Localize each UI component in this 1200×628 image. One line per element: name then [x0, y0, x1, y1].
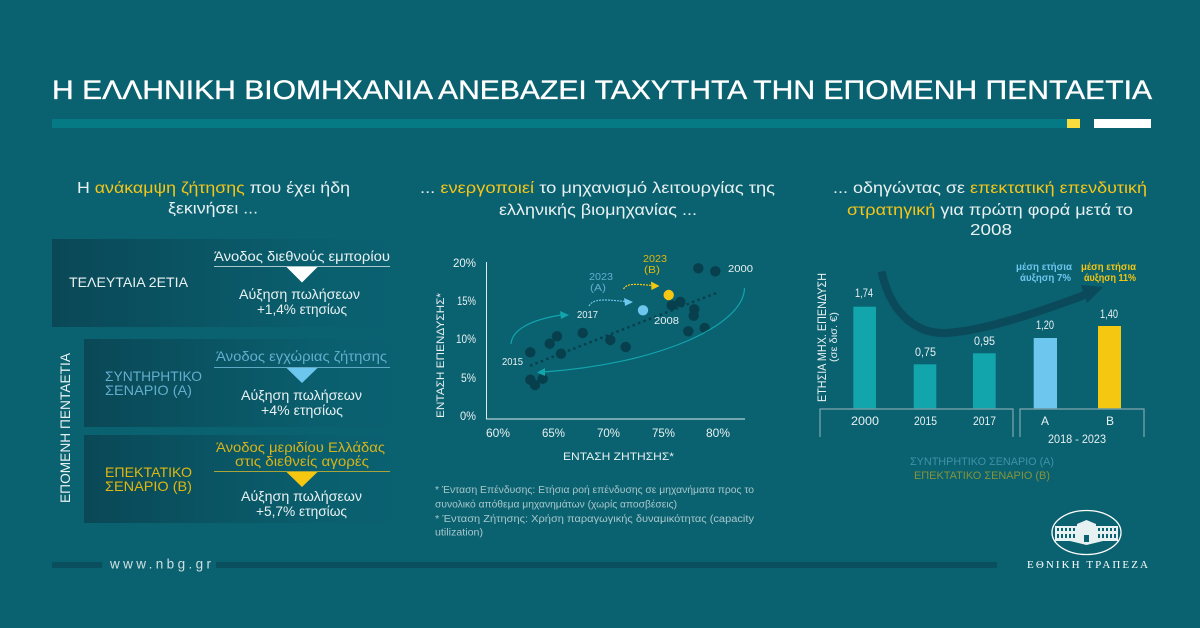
heading: middle column: ... ενεργοποιεί το μηχανισμό λειτουργίας της: [420, 180, 775, 197]
bar chart: [817, 262, 1144, 446]
panel: last two years: [52, 239, 402, 327]
point labels: [502, 253, 753, 368]
growth callouts: άυξηση 11%: [1084, 273, 1136, 284]
growth arrow: [882, 272, 1103, 333]
point labels: (Β): [644, 264, 660, 276]
bar chart: (σε δισ. €): [829, 312, 840, 362]
footnotes: [435, 484, 754, 538]
panel: scenario B: +5,7% ετησίως: [256, 503, 347, 519]
label: next five years: ΕΠΟΜΕΝΗ ΠΕΝΤΑΕΤΙΑ: [57, 352, 73, 503]
axis labels: ΕΝΤΑΣΗ ΕΠΕΝΔΥΣΗΣ*: [435, 292, 447, 418]
panel: last two years: Άνοδος διεθνούς εμπορίου: [214, 248, 390, 264]
scatter chart: [435, 253, 753, 463]
panel: last two years: +1,4% ετησίως: [257, 301, 347, 317]
panel: scenario B: [84, 435, 402, 523]
point labels: 2023: [589, 271, 613, 283]
legend: [910, 456, 1054, 482]
x labels: 2017: [973, 416, 996, 428]
point labels: 2000: [728, 263, 753, 275]
title rule: [52, 119, 1151, 128]
heading: middle column: ελληνικής βιομηχανίας ...: [499, 202, 697, 219]
point labels: 2015: [502, 356, 523, 368]
bar values: 1,20: [1036, 320, 1054, 332]
axis labels: 75%: [652, 428, 675, 440]
logo: National Bank of Greece: ΕΘΝΙΚΗ ΤΡΑΠΕΖΑ: [1027, 559, 1148, 571]
axis labels: ΕΝΤΑΣΗ ΖΗΤΗΣΗΣ*: [563, 451, 675, 463]
panel: scenario B: ΣΕΝΑΡΙΟ (Β): [105, 478, 192, 494]
heading: left column: [77, 180, 350, 218]
panel: scenario A: Άνοδος εγχώριας ζήτησης: [216, 348, 387, 364]
point labels: 2017: [577, 309, 598, 321]
growth callouts: [1016, 262, 1137, 284]
axis labels: 10%: [456, 334, 476, 346]
footnotes: utilization): [435, 528, 483, 538]
bar values: 0,75: [915, 347, 936, 359]
panel: scenario A: ΣΕΝΑΡΙΟ (Α): [105, 382, 192, 398]
point labels: (Α): [590, 282, 606, 294]
panel: scenario B: Αύξηση πωλήσεων: [241, 488, 362, 504]
scatter points: [525, 263, 720, 390]
x labels: 2000: [851, 416, 879, 428]
panel: scenario B: ΕΠΕΚΤΑΤΙΚΟ: [105, 464, 192, 480]
x labels: [851, 416, 1114, 446]
heading: right column: 2008: [970, 222, 1012, 239]
title: Η ΕΛΛΗΝΙΚΗ ΒΙΟΜΗΧΑΝΙΑ ΑΝΕΒΑΖΕΙ ΤΑΧΥΤΗΤΑ ΤΗΝ ΕΠΟΜΕΝΗ ΠΕΝΤΑΕΤΙΑ: [52, 75, 1152, 105]
axis labels: 5%: [461, 373, 476, 385]
axis labels: 0%: [460, 411, 476, 423]
legend: ΣΥΝΤΗΡΗΤΙΚΟ ΣΕΝΑΡΙΟ (Α): [910, 456, 1054, 468]
heading: right column: ... οδηγώντας σε επεκτατική επενδυτική: [833, 180, 1147, 197]
x labels: Α: [1041, 416, 1049, 428]
footnotes: * Ένταση Επένδυσης: Ετήσια ροή επένδυσης σε μηχανήματα προς το: [435, 484, 754, 496]
axis brackets: [820, 409, 1144, 437]
axis labels: 70%: [597, 428, 620, 440]
axis labels: 60%: [486, 428, 510, 440]
x labels: 2015: [914, 416, 937, 428]
panel: scenario B: στις διεθνείς αγορές: [235, 453, 369, 469]
growth callouts: άυξηση 7%: [1020, 273, 1071, 284]
growth callouts: μέση ετήσια: [1016, 262, 1073, 273]
x labels: Β: [1106, 416, 1114, 428]
growth callouts: μέση ετήσια: [1081, 262, 1137, 273]
axis labels: 65%: [542, 428, 565, 440]
x labels: 2018 - 2023: [1048, 434, 1106, 446]
axis title: ΕΤΗΣΙΑ ΜΗΧ. ΕΠΕΝΔΥΣΗ: [817, 273, 829, 402]
panel: scenario A: Αύξηση πωλήσεων: [241, 387, 362, 403]
axis labels: 15%: [457, 296, 476, 308]
panel: last two years: Αύξηση πωλήσεων: [239, 286, 360, 302]
bar values: 0,95: [974, 336, 995, 348]
trend arrows: [511, 282, 744, 376]
panel: scenario B: Άνοδος μεριδίου Ελλάδας: [216, 439, 385, 455]
legend: ΕΠΕΚΤΑΤΙΚΟ ΣΕΝΑΡΙΟ (Β): [914, 470, 1050, 482]
bars: [853, 307, 876, 408]
axis labels: [435, 258, 730, 463]
panel: last two years: ΤΕΛΕΥΤΑΙΑ 2ΕΤΙΑ: [69, 274, 189, 290]
axis labels: 80%: [706, 428, 730, 440]
panel: scenario A: [84, 339, 402, 427]
footnotes: * Ένταση Ζήτησης: Χρήση παραγωγικής δυναμικότητας (capacity: [435, 513, 754, 525]
footer line and url: www.nbg.gr: [109, 556, 212, 572]
point labels: 2023: [643, 253, 667, 265]
logo: National Bank of Greece: [1027, 510, 1148, 571]
panel: scenario A: ΣΥΝΤΗΡΗΤΙΚΟ: [105, 368, 202, 384]
heading: left column: ξεκινήσει ...: [168, 200, 258, 218]
heading: right column: στρατηγική για πρώτη φορά μετά το: [847, 202, 1133, 219]
heading: left column: Η ανάκαμψη ζήτησης που έχει ήδη: [77, 180, 350, 197]
panel: scenario A: +4% ετησίως: [261, 402, 343, 418]
axis labels: 20%: [453, 258, 476, 270]
heading: middle column: [420, 180, 775, 219]
bar values: [855, 288, 1118, 359]
point labels: 2008: [654, 315, 679, 327]
heading: right column: [833, 180, 1147, 239]
bar values: 1,74: [855, 288, 873, 300]
footer line and url: [52, 556, 997, 572]
bar values: 1,40: [1100, 309, 1118, 321]
footnotes: συνολικό απόθεμα μηχανημάτων (χωρίς αποσβέσεις): [435, 498, 677, 510]
